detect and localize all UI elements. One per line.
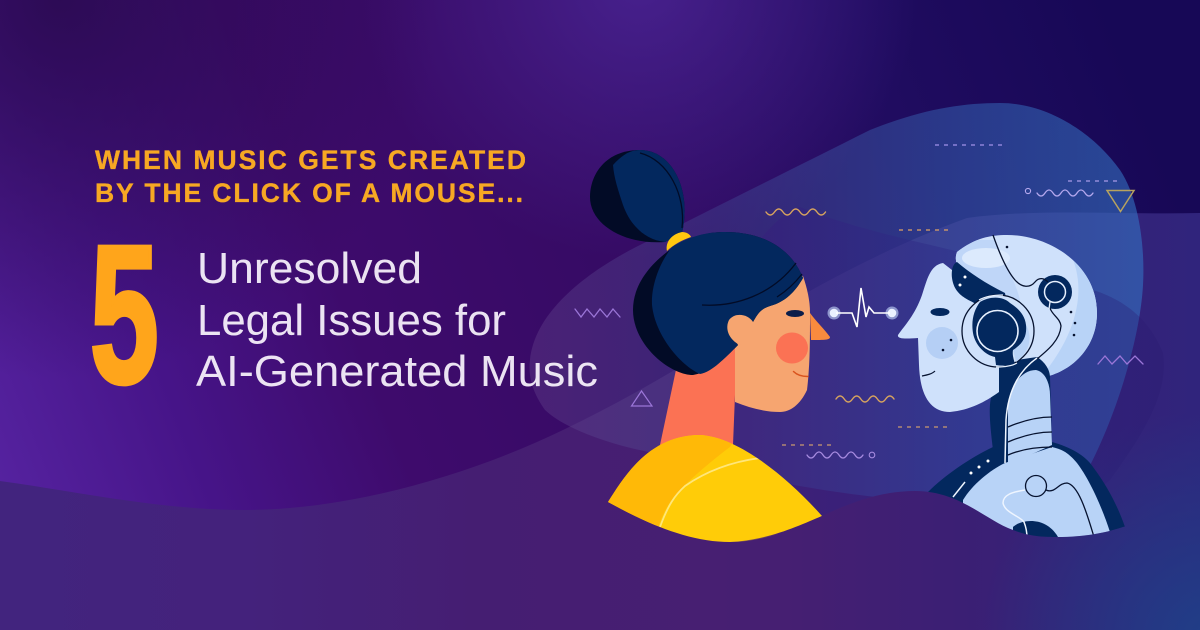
- robot side joint: [1038, 275, 1072, 309]
- title: Legal Issues for: [197, 297, 506, 345]
- nose: [810, 313, 830, 340]
- title: [196, 245, 598, 396]
- robot body: [928, 442, 1125, 560]
- heading: eyebrow: [95, 145, 526, 208]
- icon: dashes upper right: [1068, 180, 1120, 182]
- icon: dashes top: [935, 144, 1003, 146]
- dark overlay shape: [687, 207, 1164, 530]
- heading: eyebrow: WHEN MUSIC GETS CREATED: [95, 145, 526, 175]
- illustration: robot: [898, 235, 1125, 560]
- decorative squiggles and dashes: [575, 145, 1143, 458]
- title: Unresolved: [197, 245, 422, 293]
- icon: purple wave lower: [807, 452, 863, 458]
- pulse line: [828, 288, 898, 327]
- hair: [633, 232, 803, 375]
- robot ear disc: [962, 295, 1034, 367]
- icon: purple zigzag left: [575, 309, 620, 317]
- icon: small circle lower: [869, 452, 875, 458]
- big number 5: 5: [90, 205, 159, 424]
- robot eye: [930, 308, 950, 316]
- hair tie: [667, 232, 691, 251]
- icon: gold dashes middle: [898, 426, 950, 428]
- icon: triangle left: [632, 391, 652, 406]
- hair bun: [590, 150, 685, 242]
- shirt: [608, 435, 822, 542]
- icon: gold wave lower: [836, 396, 894, 402]
- illustration: woman: [590, 150, 830, 550]
- icon: gold wave top: [766, 209, 826, 215]
- robot head dome: [956, 235, 1097, 376]
- robot circuit lines: [993, 235, 1061, 463]
- icon: wave upper right: [1037, 190, 1093, 196]
- robot body details: [953, 460, 1094, 545]
- ear: [727, 315, 753, 344]
- icon: small circle upper right: [1025, 188, 1031, 194]
- foreground wave: [731, 491, 1125, 560]
- robot face: [898, 263, 1000, 412]
- face: [735, 276, 810, 412]
- background wave: [0, 212, 1200, 630]
- heading: eyebrow: BY THE CLICK OF A MOUSE...: [95, 178, 523, 208]
- icon: gold dashes lower: [782, 444, 832, 446]
- robot smile: [922, 371, 935, 376]
- corner blue glow: [950, 380, 1200, 630]
- neck: [660, 345, 737, 445]
- robot neck: [990, 357, 1052, 465]
- robot head dots: [1006, 246, 1076, 336]
- eye: [786, 310, 804, 317]
- blue blob: [530, 103, 1143, 502]
- cheek: [776, 332, 808, 364]
- icon: purple zigzag right: [1098, 356, 1143, 364]
- icon: gold triangle: [1107, 190, 1134, 212]
- robot cheek: [926, 327, 958, 359]
- robot dark strip: [952, 262, 1012, 330]
- icon: gold dashes upper: [899, 229, 950, 231]
- title: AI-Generated Music: [196, 348, 598, 396]
- smile: [794, 372, 808, 376]
